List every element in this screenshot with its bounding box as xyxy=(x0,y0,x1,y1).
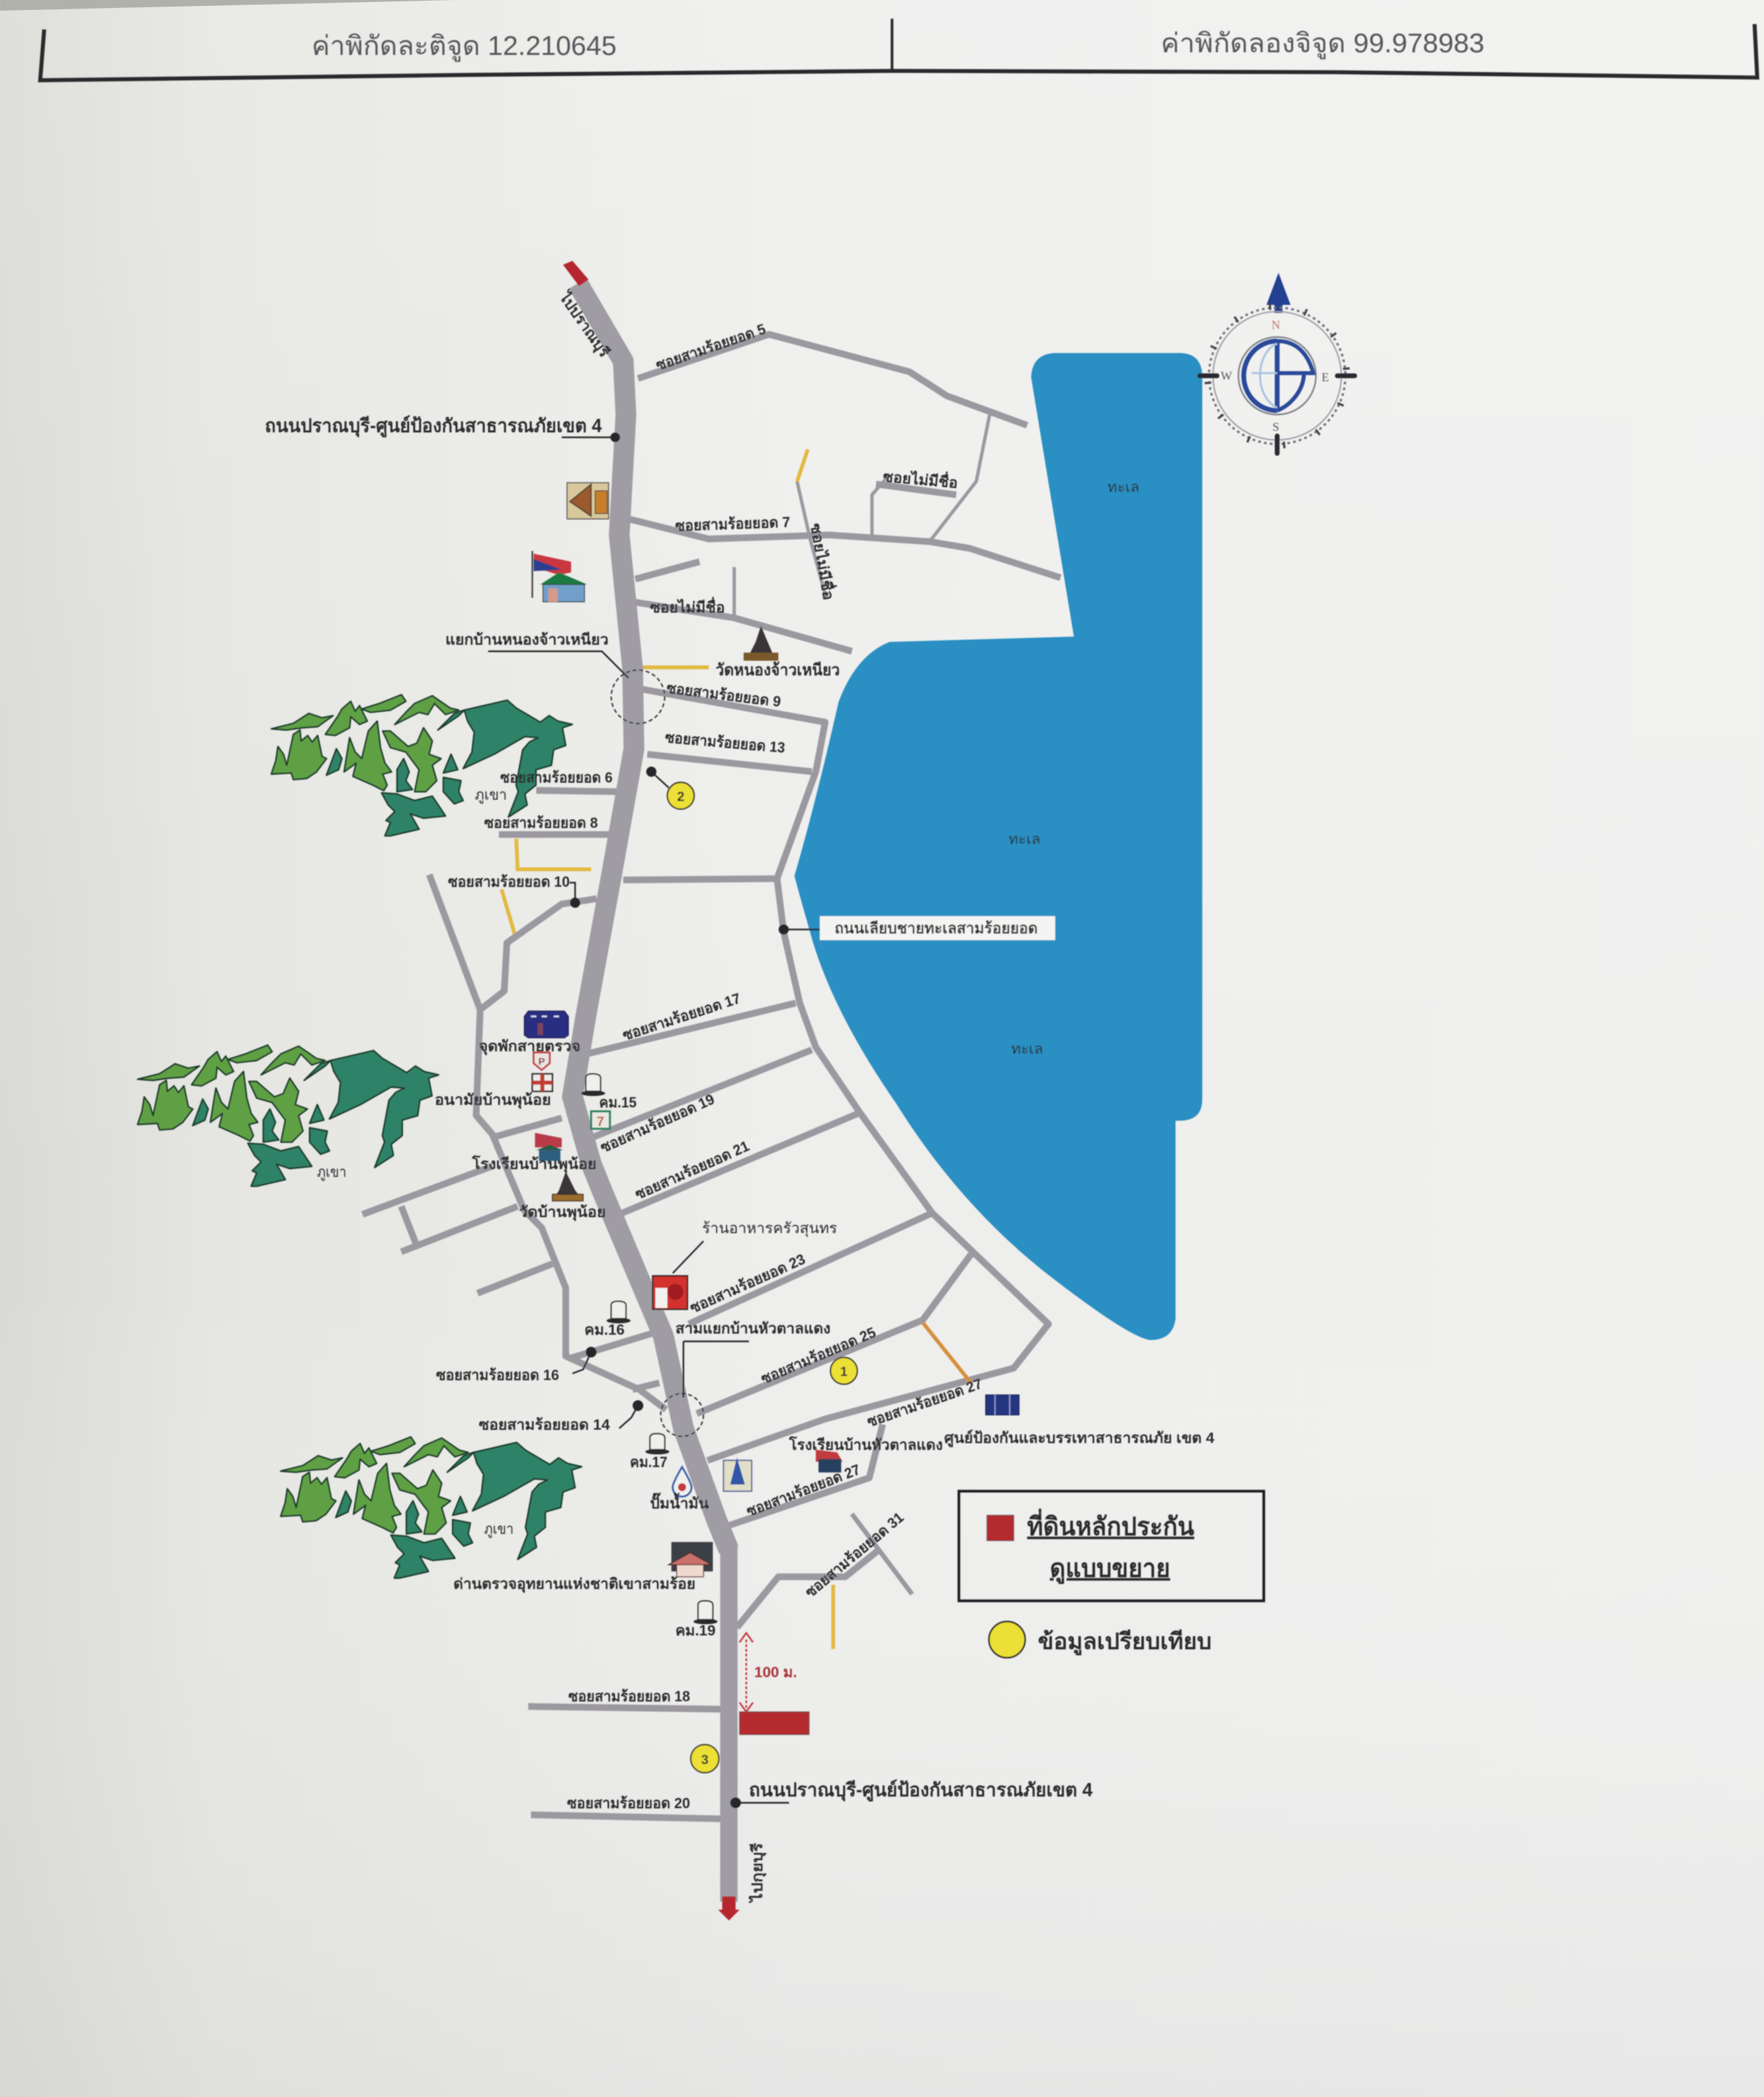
road and place labels xyxy=(265,287,1215,1904)
compass rose: N xyxy=(1272,318,1280,332)
road and place labels: ปั๊มน้ำมัน xyxy=(650,1492,709,1512)
south lanes xyxy=(528,1707,721,1819)
road and place labels: ซอยสามร้อยยอด 13 xyxy=(664,729,786,756)
road and place labels: ซอยไม่มีชื่อ xyxy=(650,597,725,616)
icon: km post 19 xyxy=(693,1601,717,1625)
longitude text: ค่าพิกัดลองจิจูด 99.978983 xyxy=(1161,28,1484,60)
icon: house building north xyxy=(567,483,609,519)
icon: fuel station drop xyxy=(673,1467,691,1497)
road and place labels: ซอยไม่มีชื่อ xyxy=(807,521,840,602)
road and place labels: ซอยสามร้อยยอด 16 xyxy=(436,1367,559,1384)
road and place labels: ถนนปราณบุรี-ศูนย์ป้องกันสาธารณภัยเขต 4 xyxy=(749,1779,1093,1801)
legend yellow marker: ข้อมูลเปรียบเทียบ xyxy=(1037,1629,1212,1656)
beach road label xyxy=(820,916,1055,940)
sea labels: ทะเล xyxy=(1011,1041,1043,1057)
road and place labels: ด่านตรวจอุทยานแห่งชาติเขาสามร้อย xyxy=(453,1576,695,1593)
road and place labels: ซอยสามร้อยยอด 10 xyxy=(448,873,570,890)
compass rose xyxy=(1200,273,1354,453)
road and place labels: ไปกุยบุรี xyxy=(748,1843,767,1904)
road and place labels: อนามัยบ้านพุน้อย xyxy=(435,1091,551,1109)
comparison marker 1 xyxy=(830,1357,858,1384)
legend title: ที่ดินหลักประกัน xyxy=(1027,1509,1194,1541)
mountain middle xyxy=(138,1045,439,1186)
icon: shrine xyxy=(724,1458,752,1491)
comparison marker 2 xyxy=(668,782,694,809)
sea labels: ทะเล xyxy=(1008,830,1040,847)
icon: flag school north xyxy=(532,551,587,602)
road and place labels: ไปปราณบุรี xyxy=(554,287,613,361)
road and place labels: โรงเรียนบ้านหัวตาลแดง xyxy=(789,1436,943,1453)
road and place labels: ซอยสามร้อยยอด 18 xyxy=(568,1688,690,1705)
road and place labels: ซอยสามร้อยยอด 27 xyxy=(865,1375,984,1430)
leader lines and dots xyxy=(488,433,820,1808)
road and place labels: สามแยกบ้านหัวตาลแดง xyxy=(676,1320,830,1337)
icon: disaster centre xyxy=(986,1395,1019,1415)
road and place labels: ซอยสามร้อยยอด 9 xyxy=(666,680,782,710)
east side lanes and coast road xyxy=(587,879,1049,1649)
road and place labels: ภูเขา xyxy=(484,1521,513,1538)
comparison marker 3 xyxy=(691,1744,719,1773)
road and place labels: ถนนปราณบุรี-ศูนย์ป้องกันสาธารณภัยเขต 4 xyxy=(265,415,602,437)
road and place labels: ซอยสามร้อยยอด 6 xyxy=(500,769,613,785)
icon: national park checkpoint xyxy=(669,1542,713,1577)
road and place labels: ร้านอาหารครัวสุนทร xyxy=(702,1220,837,1237)
icon: clinic xyxy=(532,1074,552,1091)
legend subtitle: ดูแบบขยาย xyxy=(1050,1554,1170,1584)
road network xyxy=(363,283,1061,1902)
sea labels: ทะเล xyxy=(1108,479,1139,496)
icon: 7-eleven xyxy=(591,1111,610,1130)
icon: km post 15 xyxy=(581,1074,605,1096)
road and place labels: ซอยสามร้อยยอด 20 xyxy=(567,1795,690,1811)
icon: school Ban Phu Noi xyxy=(535,1133,563,1161)
road and place labels: วัดบ้านพุน้อย xyxy=(519,1204,606,1222)
road and place labels: ซอยสามร้อยยอด 21 xyxy=(633,1138,752,1202)
junction circle south xyxy=(661,1394,703,1437)
sea xyxy=(795,353,1202,1340)
latitude text: ค่าพิกัดละติจูด 12.210645 xyxy=(312,30,617,62)
legend yellow marker xyxy=(989,1622,1212,1658)
compass rose: E xyxy=(1321,371,1329,384)
sea labels xyxy=(1008,479,1139,1057)
icon: parking xyxy=(534,1053,550,1070)
header coordinates table xyxy=(40,19,1757,80)
comparison marker 3: 3 xyxy=(701,1753,709,1767)
distance arrow 100 m xyxy=(740,1633,797,1712)
legend box xyxy=(959,1491,1264,1601)
road and place labels: ซอยสามร้อยยอด 14 xyxy=(479,1416,610,1433)
road and place labels: วัดหนองจ้าวเหนียว xyxy=(715,661,840,680)
south arrow head of main road xyxy=(718,1896,740,1920)
road and place labels: ซอยสามร้อยยอด 17 xyxy=(621,990,742,1044)
beach road label: ถนนเลียบชายทะเลสามร้อยยอด xyxy=(834,920,1037,937)
junction circle north xyxy=(611,670,665,723)
road and place labels: ซอยสามร้อยยอด 27 xyxy=(744,1461,863,1520)
road and place labels: คม.15 xyxy=(599,1094,637,1110)
icon: temple Ban Phu Noi xyxy=(552,1171,583,1201)
road and place labels: ซอยสามร้อยยอด 5 xyxy=(654,320,768,374)
comparison marker 2: 2 xyxy=(677,790,684,805)
mountain north xyxy=(271,695,572,836)
road and place labels: คม.17 xyxy=(630,1454,668,1470)
north arrow head of main road xyxy=(563,261,588,287)
road and place labels: จุดพักสายตรวจ xyxy=(479,1038,580,1056)
icon: km post 17 xyxy=(645,1434,670,1454)
legend red swatch xyxy=(987,1515,1014,1540)
road and place labels: ซอยสามร้อยยอด 31 xyxy=(802,1509,907,1601)
icon: km post 16 xyxy=(607,1301,631,1323)
road and place labels: ภูเขา xyxy=(475,787,507,804)
compass rose: S xyxy=(1272,420,1279,433)
road and place labels: ซอยสามร้อยยอด 8 xyxy=(484,815,598,831)
compass rose: W xyxy=(1221,369,1233,382)
road and place labels: ซอยสามร้อยยอด 7 xyxy=(675,513,791,534)
road and place labels: ภูเขา xyxy=(317,1164,347,1181)
road and place labels: ซอยไม่มีชื่อ xyxy=(883,466,959,491)
road and place labels: ซอยสามร้อยยอด 19 xyxy=(597,1091,717,1156)
icon: 7-eleven: 7 xyxy=(597,1115,604,1130)
main road xyxy=(572,283,729,1902)
distance arrow 100 m: 100 ม. xyxy=(754,1664,797,1680)
icon: restaurant xyxy=(652,1276,687,1310)
road and place labels: แยกบ้านหนองจ้าวเหนียว xyxy=(445,631,609,648)
road and place labels: คม.19 xyxy=(676,1623,715,1639)
icon: police box xyxy=(524,1011,568,1038)
road and place labels: ซอยสามร้อยยอด 23 xyxy=(687,1251,808,1316)
mountain south xyxy=(281,1437,582,1578)
icon: parking: P xyxy=(539,1056,545,1067)
road and place labels: โรงเรียนบ้านพุน้อย xyxy=(472,1155,597,1173)
road and place labels: คม.16 xyxy=(584,1321,625,1338)
road and place labels: ศูนย์ป้องกันและบรรเทาสาธารณภัย เขต 4 xyxy=(944,1430,1215,1448)
north side lanes xyxy=(623,334,1061,880)
road and place labels: ซอยสามร้อยยอด 25 xyxy=(758,1324,878,1387)
icon: temple north xyxy=(744,626,778,660)
icon: school Hua Tan Daeng xyxy=(816,1450,842,1472)
comparison marker 1: 1 xyxy=(840,1365,848,1380)
collateral land parcel xyxy=(740,1712,809,1734)
west side lanes xyxy=(363,790,666,1409)
